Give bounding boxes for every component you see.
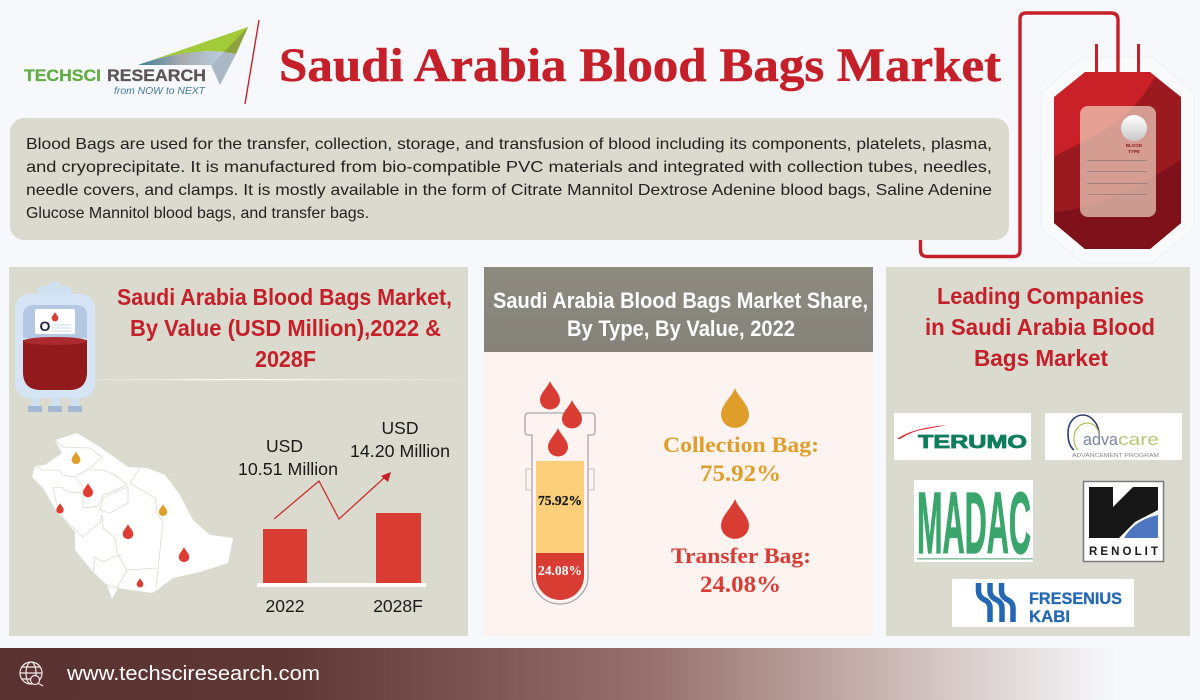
legend: collection bag: 75.92% [700, 461, 781, 486]
logo: Advacare: adva [1083, 430, 1119, 449]
bar chart: market value 2022 and 2028F: 2022 [266, 596, 304, 616]
icon: small blood bag [15, 282, 95, 412]
logo: Advacare: ADVANCEMENT PROGRAM [1072, 453, 1159, 459]
intro text block: and cryoprecipitate. It is manufactured from bio-compatible PVC materials and integrated with collection tubes, needles, [26, 159, 992, 176]
test tube chart: 75.92% [538, 493, 582, 508]
icon: globe with magnifier [20, 662, 43, 686]
heading: leading companies: Bags Market [974, 345, 1108, 371]
logo: Advacare [1045, 413, 1182, 460]
heading: market share: By Type, By Value, 2022 [567, 316, 795, 341]
icon: large blood bag with tube [920, 13, 1194, 263]
panel: market share by type [484, 267, 873, 636]
panel: market value [9, 267, 468, 636]
logo: MADAC [914, 475, 1033, 572]
icon: large blood bag with tube: TYPE [1128, 149, 1140, 154]
heading: leading companies: Leading Companies [937, 283, 1144, 309]
bar chart: market value 2022 and 2028F: USD [382, 418, 418, 438]
legend: transfer bag: Transfer Bag: [671, 543, 811, 568]
bar chart: market value 2022 and 2028F: 10.51 Million [238, 459, 338, 479]
heading: market share [493, 288, 868, 341]
heading: leading companies [925, 283, 1155, 371]
heading: market value: Saudi Arabia Blood Bags Market, [117, 284, 452, 310]
legend: collection bag [663, 388, 819, 486]
logo: Fresenius Kabi: KABI [1029, 608, 1070, 626]
intro text block [10, 118, 1009, 240]
icon: large blood bag with tube: BLOOD [1126, 143, 1143, 148]
bar chart: market value 2022 and 2028F [238, 418, 450, 616]
logo: Fresenius Kabi [952, 579, 1134, 627]
logo: Fresenius Kabi: FRESENIUS [1029, 590, 1122, 608]
logo: TechSci Research: TECHSCI [24, 66, 101, 85]
bar chart: market value 2022 and 2028F: USD [266, 436, 303, 456]
legend: transfer bag: 24.08% [700, 572, 781, 597]
heading: market value: By Value (USD Million),2022 & [130, 315, 441, 341]
logo: Advacare: care [1118, 430, 1159, 449]
logo: Terumo [894, 413, 1031, 460]
footer bar [0, 648, 1200, 700]
test tube chart: 24.08% [538, 563, 582, 578]
test tube chart [525, 381, 595, 604]
icon: small blood bag: O [40, 318, 51, 334]
intro text block: Glucose Mannitol blood bags, and transfer bags. [26, 205, 369, 222]
logo: TechSci Research: RESEARCH [107, 66, 206, 85]
panel: leading companies [886, 267, 1190, 636]
heading: leading companies: in Saudi Arabia Blood [925, 314, 1155, 340]
logo: TechSci Research [24, 27, 248, 97]
heading: market value: 2028F [255, 346, 316, 372]
logo: Terumo: TERUMO [918, 432, 1027, 452]
bar chart: market value 2022 and 2028F: 14.20 Million [350, 441, 450, 461]
heading: market share: Saudi Arabia Blood Bags Market Share, [493, 288, 868, 313]
title: Saudi Arabia Blood Bags Market [279, 39, 1001, 92]
map of Saudi Arabia [32, 433, 233, 599]
logo: TechSci Research: from NOW to NEXT [114, 85, 207, 97]
intro text block: needle covers, and clamps. It is mostly available in the form of Citrate Mannitol Dextrose Adenine blood bags, Saline Adenine [26, 182, 992, 199]
intro text block: Blood Bags are used for the transfer, collection, storage, and transfusion of blood including its components, platelets, plasma, [26, 136, 992, 153]
website url: www.techsciresearch.com [66, 663, 320, 685]
heading: market value [117, 284, 452, 372]
bar chart: market value 2022 and 2028F: 2028F [373, 596, 423, 616]
logo: Renolit: RENOLIT [1089, 546, 1158, 558]
legend: transfer bag [671, 499, 811, 597]
legend: collection bag: Collection Bag: [663, 432, 819, 457]
logo: Renolit [1084, 482, 1164, 562]
arrow: growth trend [274, 472, 391, 519]
